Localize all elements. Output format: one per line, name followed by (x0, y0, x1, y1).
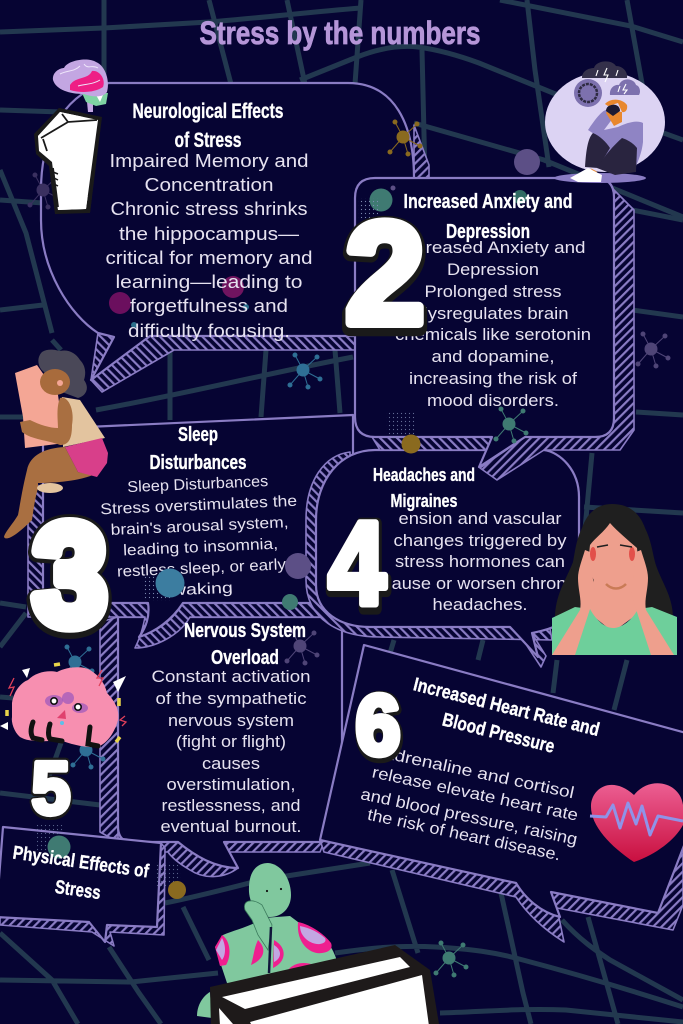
icon: woman hugging pillow (4, 350, 108, 538)
heading: anxiety and depression (404, 191, 572, 243)
heading: neurological effects: of Stress (174, 129, 242, 152)
text: nervous system overload body: (fight or flight) (176, 733, 286, 751)
heading: physical effects of stress: Physical Effects of (11, 843, 151, 883)
number 3: 3 (33, 494, 107, 658)
icon: thinking green person (197, 863, 336, 1018)
icon: white box (210, 945, 440, 1024)
text: nervous system overload body: causes (202, 755, 260, 773)
heading: sleep disturbances: Disturbances (150, 452, 246, 474)
text: sleep disturbances body: brain's arousal system, (110, 514, 289, 539)
text: nervous system overload body: restlessness, and (162, 797, 300, 815)
text: neurological effects body: critical for memory and (106, 248, 312, 268)
panel: physical effects callout (0, 827, 165, 946)
text: nervous system overload body: of the sympathetic (156, 690, 306, 708)
heading: heart rate and blood pressure: Blood Pressure (440, 710, 557, 758)
number 4: 4 (329, 498, 387, 636)
heading: physical effects of stress: Stress (54, 877, 102, 904)
panel: headaches and migraines bubble outline (306, 450, 579, 667)
text: heart rate and blood pressure body: and blood pressure, raising (359, 785, 579, 849)
text: anxiety and depression body: dysregulates brain (418, 305, 568, 323)
number 5: 5 (32, 747, 70, 832)
text: sleep disturbances body: restless sleep, or early (117, 556, 287, 581)
text: sleep disturbances body: waking (170, 580, 233, 599)
text: nervous system overload body (152, 668, 310, 836)
icon: stressed man in circle (545, 61, 665, 183)
text: heart rate and blood pressure body: release elevate heart rate (370, 763, 580, 825)
text: heart rate and blood pressure body (359, 744, 580, 864)
text: anxiety and depression body (395, 239, 591, 410)
number 2: 2 (345, 194, 425, 361)
text: neurological effects body: learning—leading to (116, 272, 302, 292)
heading: anxiety and depression: Depression (446, 221, 530, 243)
number 3: 3 (33, 495, 107, 655)
heading: sleep disturbances (150, 424, 246, 474)
text: nervous system overload body: overstimulation, (166, 776, 296, 794)
text: neurological effects body: difficulty focusing. (128, 321, 290, 341)
heading: physical effects of stress (11, 843, 151, 904)
text: anxiety and depression body: Increased Anxiety and (400, 239, 586, 257)
panel: neurological effects bubble outline (41, 83, 429, 392)
heading: headaches and migraines: Migraines (390, 490, 458, 511)
text: anxiety and depression body: Depression (447, 261, 539, 279)
number 4: 4 (328, 499, 386, 630)
text: neurological effects body: forgetfulness and (130, 296, 288, 316)
text: headaches and migraines body: cause or worsen chronic (382, 575, 580, 593)
text: anxiety and depression body: mood disorders. (427, 392, 559, 410)
number 1 (34, 108, 102, 214)
text: headaches and migraines body (382, 510, 580, 614)
number 1: 1 (25, 72, 111, 245)
heading: sleep disturbances: Sleep (178, 424, 218, 446)
panel: anxiety and depression bubble outline (355, 178, 634, 480)
text: neurological effects body: Chronic stress shrinks (110, 199, 308, 219)
decoration: blue circle over sleep text (156, 568, 184, 598)
icon: crying pink brain (0, 664, 126, 747)
text: heart rate and blood pressure body: the risk of heart disease. (366, 806, 562, 864)
heading: anxiety and depression: Increased Anxiety and (404, 191, 572, 213)
panel: nervous system overload bubble outline (100, 617, 342, 877)
text: nervous system overload body: nervous system (168, 712, 294, 730)
heading: nervous system overload: Overload (211, 647, 279, 669)
number 5: 5 (32, 748, 70, 830)
text: anxiety and depression body: chemicals like serotonin (395, 326, 591, 344)
text: neurological effects body: Concentration (144, 175, 274, 195)
text: headaches and migraines body: stress hormones can (395, 553, 565, 571)
text: anxiety and depression body: and dopamine, (432, 348, 554, 366)
icon: brain with pink lobe (53, 60, 108, 112)
icon: heart with pulse (590, 783, 683, 862)
text: headaches and migraines body: headaches. (432, 596, 528, 614)
heading: headaches and migraines: Headaches and (373, 464, 475, 485)
number 1: 1 (25, 72, 111, 245)
text: sleep disturbances body (99, 472, 301, 602)
decoration: circles and molecules (28, 120, 670, 977)
text: neurological effects body: Impaired Memory and (110, 151, 308, 171)
text: sleep disturbances body: leading to insomnia, (123, 536, 278, 559)
heading: heart rate and blood pressure: Increased Heart Rate and (411, 674, 602, 741)
heading: headaches and migraines (373, 464, 475, 511)
number 6: 6 (356, 679, 400, 772)
text: neurological effects body: the hippocampus— (119, 224, 299, 244)
heading: nervous system overload: Nervous System (184, 620, 306, 642)
number 6: 6 (357, 678, 401, 776)
text: heart rate and blood pressure body: Adrenaline and cortisol (380, 744, 576, 802)
text: sleep disturbances body: Sleep Disturbances (127, 473, 269, 496)
icon: woman with headache (552, 504, 677, 655)
text: sleep disturbances body: Stress overstimulates the (100, 493, 297, 518)
text: anxiety and depression body: increasing the risk of (409, 370, 577, 388)
number 2: 2 (346, 194, 424, 354)
panel: sleep disturbances bubble outline (28, 415, 353, 648)
text: neurological effects body (106, 151, 312, 341)
panel: heart rate and blood pressure bubble outline (320, 645, 683, 942)
title: Stress by the numbers (200, 15, 480, 51)
heading: nervous system overload (184, 620, 306, 669)
text: headaches and migraines body: changes triggered by (394, 532, 567, 550)
text: nervous system overload body: eventual burnout. (160, 818, 302, 836)
heading: neurological effects: Neurological Effects (132, 100, 284, 123)
text: nervous system overload body: Constant activation (152, 668, 310, 686)
text: anxiety and depression body: Prolonged stress (424, 283, 562, 301)
heading: neurological effects (132, 100, 284, 152)
text: headaches and migraines body: ension and vascular (398, 510, 562, 528)
